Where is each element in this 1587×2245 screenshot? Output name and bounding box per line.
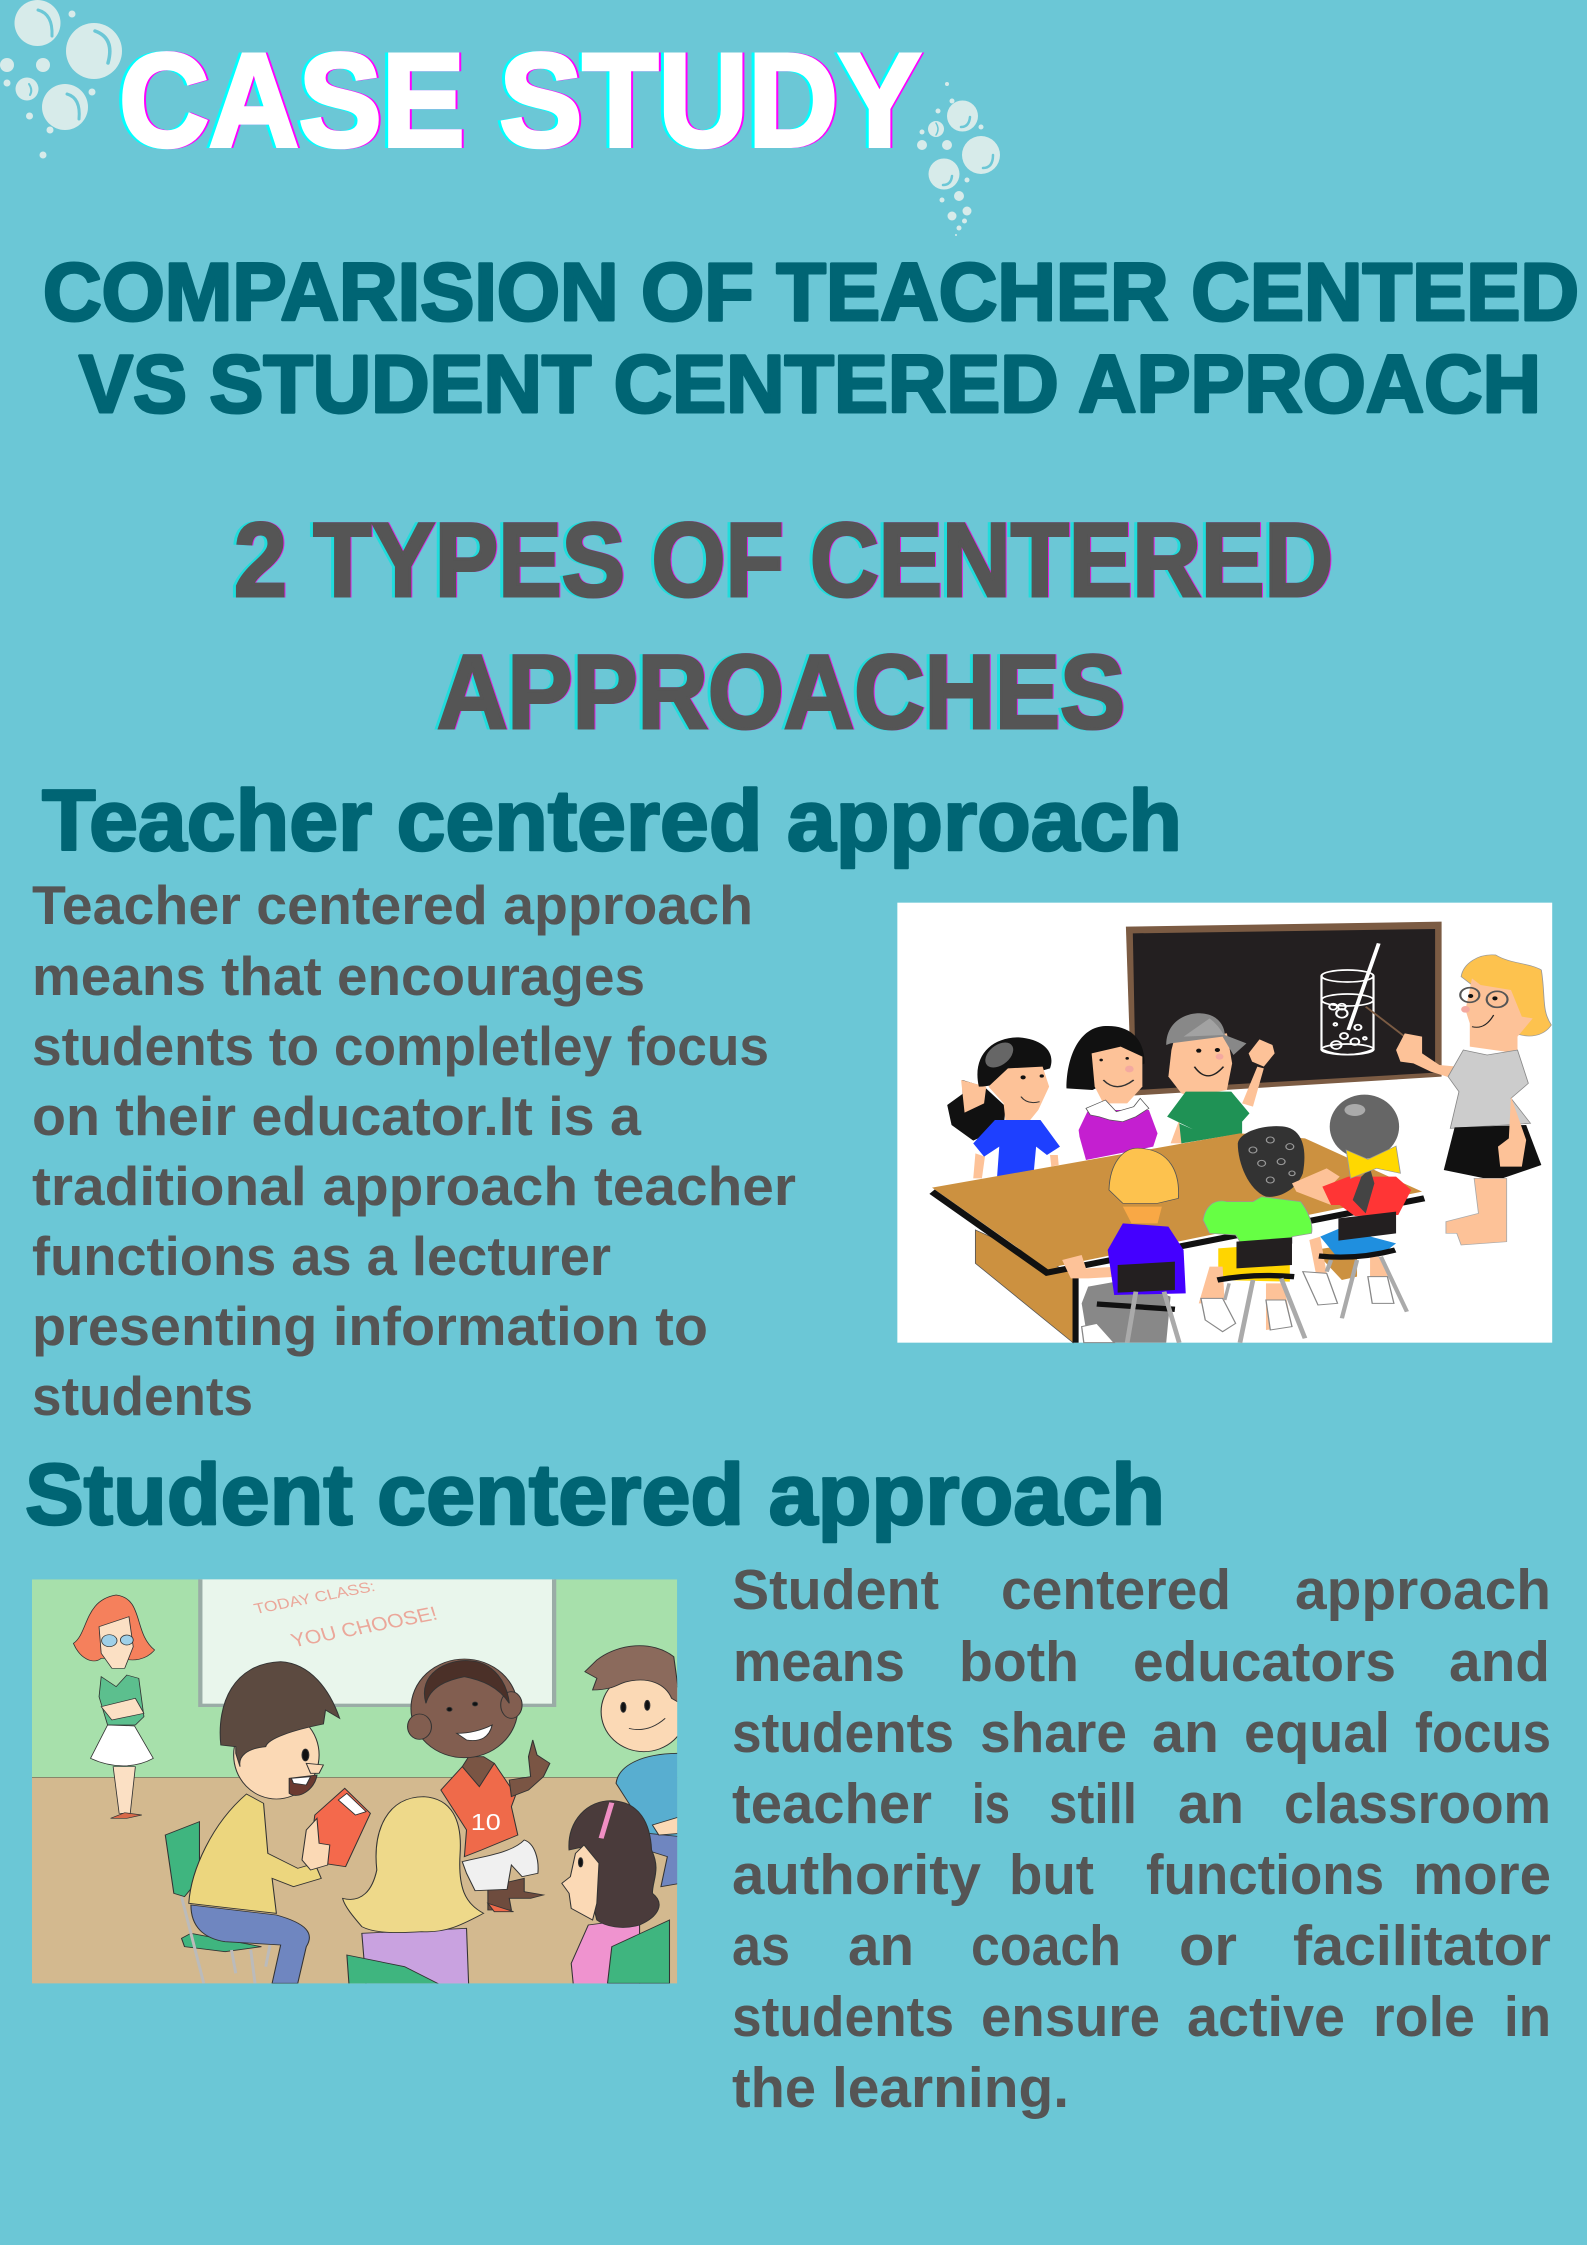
text block: student centered description: an [848, 1914, 914, 1978]
heading: comparison line 1 and 2: COMPARISION OF TEACHER CENTEED [43, 247, 1579, 338]
text block: student centered description [732, 1558, 1551, 2120]
text block: student centered description: functions [1146, 1843, 1384, 1907]
text block: teacher centered description: presenting information to [32, 1295, 708, 1357]
text block: student centered description: authority [732, 1843, 981, 1907]
heading: 2 types of centered approaches: APPROACHES [437, 634, 1125, 751]
text block: student centered description: the [732, 2056, 816, 2120]
text block: student centered description: Student [732, 1558, 939, 1622]
text block: student centered description: active [1187, 1985, 1345, 2049]
front kid: ponytail with red shirt [1292, 1095, 1411, 1318]
text block: student centered description: share [980, 1701, 1127, 1765]
text block: student centered description: means [733, 1630, 905, 1694]
text block: teacher centered description: students [32, 1365, 253, 1427]
center boy with number ten shirt: 10 [471, 1809, 501, 1835]
icon: bubbles top left [0, 0, 122, 158]
text block: student centered description: learning. [832, 2056, 1069, 2120]
kid 3 [1166, 1013, 1275, 1143]
front kid: blonde with blue shirt [1062, 1148, 1186, 1343]
text block: student centered description: still [1049, 1772, 1137, 1836]
blonde girl seen from behind [343, 1797, 484, 1985]
text block: student centered description: teacher [732, 1772, 932, 1836]
text block: student centered description: students [732, 1985, 954, 2049]
text block: teacher centered description: traditional approach teacher [32, 1155, 796, 1217]
heading: 2 types of centered approaches: 2 TYPES OF CENTERED [234, 502, 1333, 619]
standing teacher [73, 1595, 155, 1818]
front kid: curly hair with lime shirt [1199, 1126, 1312, 1343]
text block: student centered description: facilitator [1293, 1914, 1551, 1978]
text block: student centered description: and [1449, 1630, 1550, 1694]
text block: student centered description: focus [1415, 1701, 1551, 1765]
text block: student centered description: coach [971, 1914, 1121, 1978]
icon: bubbles right of title [917, 82, 1000, 236]
text block: student centered description: as [732, 1914, 790, 1978]
text block: student centered description: approach [1295, 1558, 1551, 1622]
text block: teacher centered description: on their educator.It is a [32, 1085, 641, 1147]
whiteboard writing [252, 1578, 440, 1652]
text block: student centered description: classroom [1284, 1772, 1551, 1836]
text block: student centered description: educators [1133, 1630, 1396, 1694]
heading: teacher centered approach: Teacher centered approach [42, 773, 1182, 869]
text block: teacher centered description [32, 874, 796, 1427]
boy reading a book [165, 1662, 370, 1983]
text block: teacher centered description: means that encourages [32, 945, 645, 1007]
text block: student centered description: or [1179, 1914, 1237, 1978]
right boy in blue shirt [585, 1646, 687, 1887]
center boy with number ten shirt [408, 1659, 550, 1912]
kid 2 [1066, 1026, 1158, 1160]
illustration: students in a circle with the teacher standing back [32, 1578, 678, 1984]
teacher figure [1396, 955, 1551, 1245]
text block: student centered description: an [1178, 1772, 1244, 1836]
text block: student centered description: is [972, 1772, 1010, 1836]
whiteboard writing: TODAY CLASS: [252, 1578, 377, 1617]
title: CASE STUDY [119, 27, 921, 175]
text block: student centered description: ensure [981, 1985, 1160, 2049]
text block: student centered description: but [1009, 1843, 1094, 1907]
text block: student centered description: in [1504, 1985, 1551, 2049]
text block: student centered description: both [959, 1630, 1079, 1694]
text block: student centered description: an [1152, 1701, 1219, 1765]
text block: student centered description: role [1373, 1985, 1475, 2049]
text block: teacher centered description: functions as a lecturer [32, 1225, 611, 1287]
whiteboard writing: YOU CHOOSE! [288, 1602, 440, 1652]
kid 1 [947, 1037, 1060, 1178]
illustration: teacher at blackboard with students at a table [897, 902, 1552, 1344]
heading: student centered approach: Student centered approach [25, 1447, 1165, 1543]
text block: teacher centered description: Teacher centered approach [32, 874, 753, 936]
heading: 2 types of centered approaches [234, 502, 1333, 751]
text block: student centered description: more [1413, 1843, 1551, 1907]
text block: student centered description: students [732, 1701, 954, 1765]
girl with pink hairband [562, 1801, 669, 1985]
heading: comparison line 1 and 2: VS STUDENT CENTERED APPROACH [79, 339, 1541, 430]
table [932, 1133, 1424, 1343]
text block: student centered description: centered [1001, 1558, 1231, 1622]
text block: teacher centered description: students to completley focus [32, 1015, 769, 1077]
text block: student centered description: equal [1244, 1701, 1390, 1765]
heading: comparison line 1 and 2 [43, 247, 1579, 430]
